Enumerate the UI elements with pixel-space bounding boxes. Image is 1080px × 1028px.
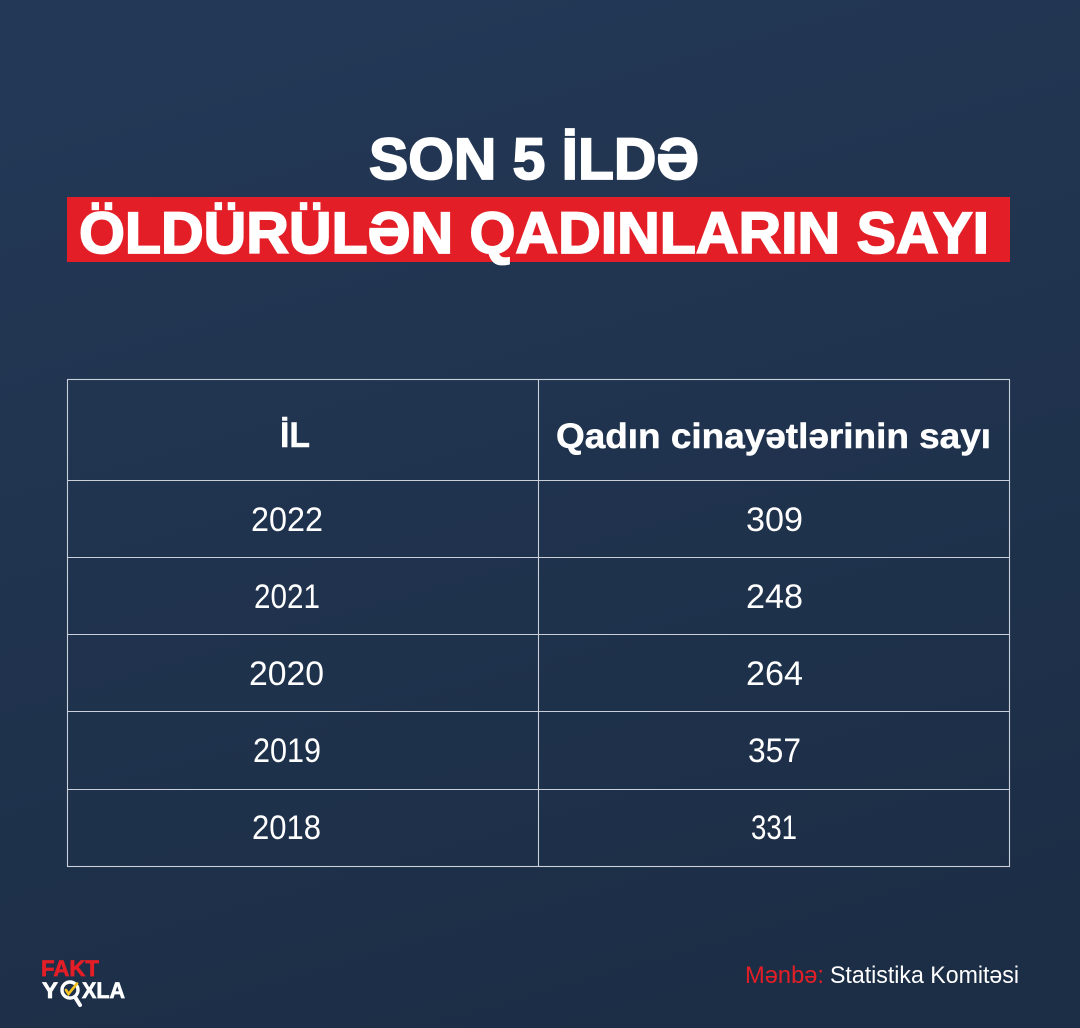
logo: Fakt Yoxla [41, 956, 125, 1005]
title highlight bar: ÖLDÜRÜLƏN QADINLARIN SAYI [79, 201, 989, 266]
source note: Mənbə: [745, 962, 824, 989]
row 2019: 357 [748, 732, 801, 770]
row 2020: 2020 [249, 655, 324, 693]
logo: Fakt Yoxla: Y [42, 978, 58, 1003]
logo: Fakt Yoxla: FAKT [41, 956, 100, 981]
row 2022: 2022 [251, 501, 323, 539]
title [67, 127, 1010, 266]
row 2020: 264 [746, 655, 803, 693]
row 2021: 2021 [254, 578, 320, 616]
row 2022: 309 [746, 501, 803, 539]
row 2020 [249, 655, 803, 693]
logo: Fakt Yoxla: XLA [82, 978, 125, 1003]
title line 1: SON 5 İLDƏ [369, 127, 699, 192]
row 2021: 248 [746, 578, 803, 616]
table header: Qadın cinayətlərinin sayı [556, 417, 991, 456]
row 2022 [251, 501, 803, 539]
row 2018: 331 [751, 809, 797, 847]
source note: Statistika Komitəsi [830, 962, 1019, 989]
data table [67, 380, 1010, 866]
row 2018: 2018 [252, 809, 321, 847]
row 2021 [254, 578, 803, 616]
row 2019 [253, 732, 801, 770]
icon: magnifier with check mark [62, 982, 80, 1005]
table header [280, 416, 991, 456]
table header: İL [280, 416, 310, 455]
row 2019: 2019 [253, 732, 321, 770]
source note [745, 962, 1019, 989]
row 2018 [252, 809, 797, 847]
